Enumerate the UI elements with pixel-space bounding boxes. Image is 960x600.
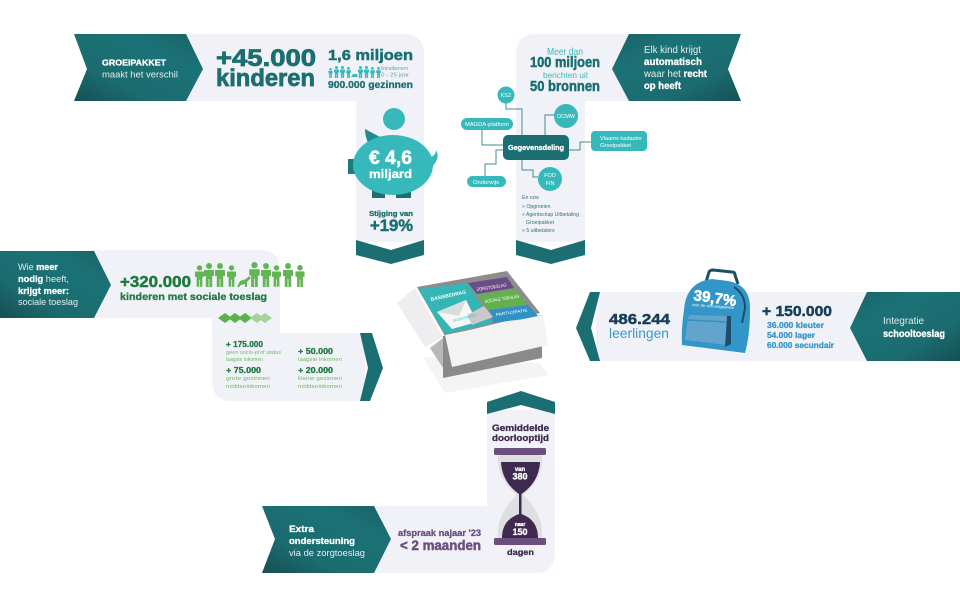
text: partner list: En vzw: [522, 195, 539, 201]
icon: diamond progress row: [218, 313, 272, 323]
tile: participatietoeslag: [489, 305, 539, 323]
node: OCMW: [554, 104, 578, 128]
box flaps: [397, 288, 443, 347]
arrow: wie meer nodig heeft: Wie meer: [18, 262, 58, 273]
arrow: wie meer nodig heeft: nodig heeft,: [18, 274, 69, 285]
tile: participatietoeslag: PARTICIPATIE: [495, 308, 528, 317]
stat: stijging van +19%: +19%: [370, 216, 413, 235]
arrow: wie meer nodig heeft: sociale toeslag: [18, 297, 78, 308]
text: partner list: » Agentschap Uitbetaling: [522, 212, 579, 218]
arrow: extra ondersteuning: [262, 506, 391, 573]
node: FOD FIN: [538, 167, 562, 191]
stat: + 150.000: 60.000 secundair: [767, 341, 834, 350]
illustration: open box: [397, 271, 549, 393]
node: FOD FIN: FOD: [544, 173, 556, 179]
arrow: chevron right: [360, 333, 383, 401]
arrow: extra ondersteuning: Extra: [289, 524, 315, 535]
node: gegevensdeling: Gegevensdeling: [508, 143, 564, 152]
text: social allowance breakdown: grote gezinnen: [226, 376, 270, 382]
text: social allowance breakdown: kleine gezinnen: [298, 376, 342, 382]
arrow: integratie schooltoeslag: Integratie: [883, 316, 924, 327]
text: meer dan 100 miljoen berichten: 50 bronnen: [530, 79, 600, 95]
heading: gemiddelde doorlooptijd: Gemiddelde: [492, 423, 549, 433]
tile: zorgtoeslag: ZORGTOESLAG: [476, 282, 507, 292]
text: social allowance breakdown: + 20.000: [298, 365, 333, 375]
text: meer dan 100 miljoen berichten: berichten uit: [543, 70, 589, 80]
stat: +320.000 kinderen met sociale toeslag: kinderen met sociale toeslag: [120, 291, 267, 303]
icon: backpack 39,7%: van de schoolgaande: [692, 302, 735, 310]
text: afspraak najaar: [398, 528, 481, 553]
node: KSZ: [498, 86, 514, 104]
panel: groeipakket background: [186, 34, 424, 242]
icon: backpack 39,7%: [682, 270, 750, 353]
text: partner list: Groeipakket: [526, 220, 555, 226]
panel: data sharing background: [516, 34, 636, 242]
tile: basisbedrag: BASISBEDRAG: [430, 290, 467, 303]
arrow: extra ondersteuning: ondersteuning: [289, 536, 355, 547]
stat: 486.244 leerlingen: [609, 311, 671, 341]
text: meer dan 100 miljoen berichten: 100 miljoen: [530, 55, 600, 71]
node: Vlaams kadaster: Vlaams kadaster: [600, 136, 642, 142]
arrow: groeipakket banner: [74, 34, 203, 101]
arrow: integratie schooltoeslag: [850, 292, 960, 361]
arrow: elk kind krijgt automatisch: automatisch: [644, 56, 702, 68]
arrow: extra ondersteuning: via de zorgtoeslag: [289, 548, 365, 559]
text: social allowance breakdown: + 50.000: [298, 346, 333, 356]
text: meer dan 100 miljoen berichten: Meer dan: [547, 46, 583, 58]
arrow: chevron up: [487, 391, 555, 414]
heading: gemiddelde doorlooptijd: doorlooptijd: [492, 433, 549, 443]
text: afspraak najaar: afspraak najaar '23: [398, 528, 481, 538]
text: social allowance breakdown: middeninkomen: [226, 384, 270, 390]
arrow: elk kind krijgt automatisch: [612, 34, 741, 101]
stat: +320.000 kinderen met sociale toeslag: +320.000: [120, 274, 191, 291]
icon: envelopes: [437, 300, 493, 329]
icon: piggy bank with 4,6 miljard: [348, 108, 438, 198]
icon: piggy bank with 4,6 miljard: € 4,6: [369, 148, 412, 169]
stat: + 150.000: [762, 303, 834, 350]
icon: hourglass: [494, 448, 546, 545]
diagram: gegevensdeling: [461, 86, 647, 191]
label: dagen: dagen: [507, 547, 534, 557]
stat: 1,6 miljoen kinderen: 900.000 gezinnen: [328, 80, 413, 91]
text: social allowance breakdown: middeninkomen: [298, 384, 342, 390]
arrow: elk kind krijgt automatisch: Elk kind krijgt: [644, 44, 701, 56]
node: MAGDA-platform: MAGDA-platform: [465, 122, 509, 128]
node: OCMW: OCMW: [557, 114, 576, 120]
stat: 1,6 miljoen kinderen: [328, 47, 413, 91]
arrow: integratie schooltoeslag: schooltoeslag: [883, 329, 945, 340]
node: gegevensdeling: [503, 135, 569, 160]
banner text: groeipakket: GROEIPAKKET: [102, 58, 167, 68]
panel: care allowance and lead time background: [370, 410, 555, 573]
text: afspraak najaar: < 2 maanden: [400, 537, 481, 553]
text: social allowance breakdown: geen socio-prof status: [226, 350, 281, 356]
tile: sociale toeslag: SOCIALE TOESLAG: [484, 294, 520, 304]
icon: hourglass: 150: [512, 527, 528, 537]
heading: +45.000 kinderen: +45.000: [216, 45, 316, 72]
banner subtext: maakt het verschil: [102, 70, 178, 80]
stat: + 150.000: + 150.000: [762, 303, 832, 320]
node: onderwijs: [467, 176, 506, 187]
heading: +45.000 kinderen: kinderen: [216, 65, 315, 92]
text: partner list: [522, 195, 579, 234]
stat: + 150.000: 54.000 lager: [767, 331, 815, 340]
heading: +45.000 kinderen: [216, 45, 316, 92]
text: social allowance breakdown: + 75.000: [226, 365, 261, 375]
text: social allowance breakdown: laagste inkomen: [226, 357, 263, 363]
tile: sociale toeslag: [477, 289, 527, 310]
arrow: elk kind krijgt automatisch: op heeft: [644, 80, 681, 92]
text: social allowance breakdown: + 175.000: [226, 339, 263, 349]
stat: stijging van +19%: Stijging van: [369, 209, 413, 218]
text: meer dan 100 miljoen berichten: [530, 46, 600, 95]
node: Vlaams kadaster: Groeipakket: [600, 143, 632, 149]
arrow: chevron down left: [356, 240, 424, 264]
stat: 1,6 miljoen kinderen: 1,6 miljoen: [328, 47, 413, 64]
node: Vlaams kadaster: [591, 131, 647, 151]
node: MAGDA-platform: [461, 118, 513, 130]
icon: hourglass: van: [515, 467, 526, 473]
stat: 486.244 leerlingen: 486.244: [609, 311, 671, 328]
text: social allowance breakdown: [226, 339, 342, 390]
text: partner list: » Opgroeien: [522, 204, 551, 210]
icon: piggy bank with 4,6 miljard: miljard: [369, 167, 412, 181]
icon: envelopes: GROEIPAKKET: [452, 313, 478, 323]
arrow: chevron down right: [516, 240, 585, 264]
arrow: wie meer nodig heeft: [0, 251, 111, 318]
stat: 486.244 leerlingen: leerlingen: [609, 325, 669, 341]
panel: school allowance background: [596, 292, 872, 361]
icon: backpack 39,7%: 39,7%: [692, 287, 737, 310]
stat: 1,6 miljoen kinderen: 0 - 25 jaar: [381, 72, 409, 78]
stat: + 150.000: 36.000 kleuter: [767, 321, 824, 330]
text: social allowance breakdown: laagste inkomen: [298, 357, 342, 363]
text: partner list: » 5 uitbetalers: [522, 228, 555, 234]
tile: basisbedrag: [418, 283, 492, 334]
arrow: elk kind krijgt automatisch: waar het recht: [643, 68, 707, 80]
stat: 1,6 miljoen kinderen: kinderen: [381, 66, 408, 72]
icon: hourglass: naar: [515, 522, 525, 528]
icon: hourglass: 380: [512, 472, 528, 482]
arrow: chevron left: [576, 292, 600, 361]
node: KSZ: KSZ: [501, 93, 512, 99]
tile: zorgtoeslag: [468, 277, 514, 294]
icon row: people: [328, 66, 381, 78]
panel: social allowance background: [90, 250, 365, 401]
heading: gemiddelde doorlooptijd: [492, 423, 549, 443]
node: FOD FIN: FIN: [546, 181, 554, 187]
arrow: wie meer nodig heeft: krijgt meer:: [18, 286, 69, 297]
node: onderwijs: Onderwijs: [473, 180, 499, 186]
stat: +320.000 kinderen met sociale toeslag: [120, 262, 305, 303]
icon row: green people: [195, 262, 305, 287]
